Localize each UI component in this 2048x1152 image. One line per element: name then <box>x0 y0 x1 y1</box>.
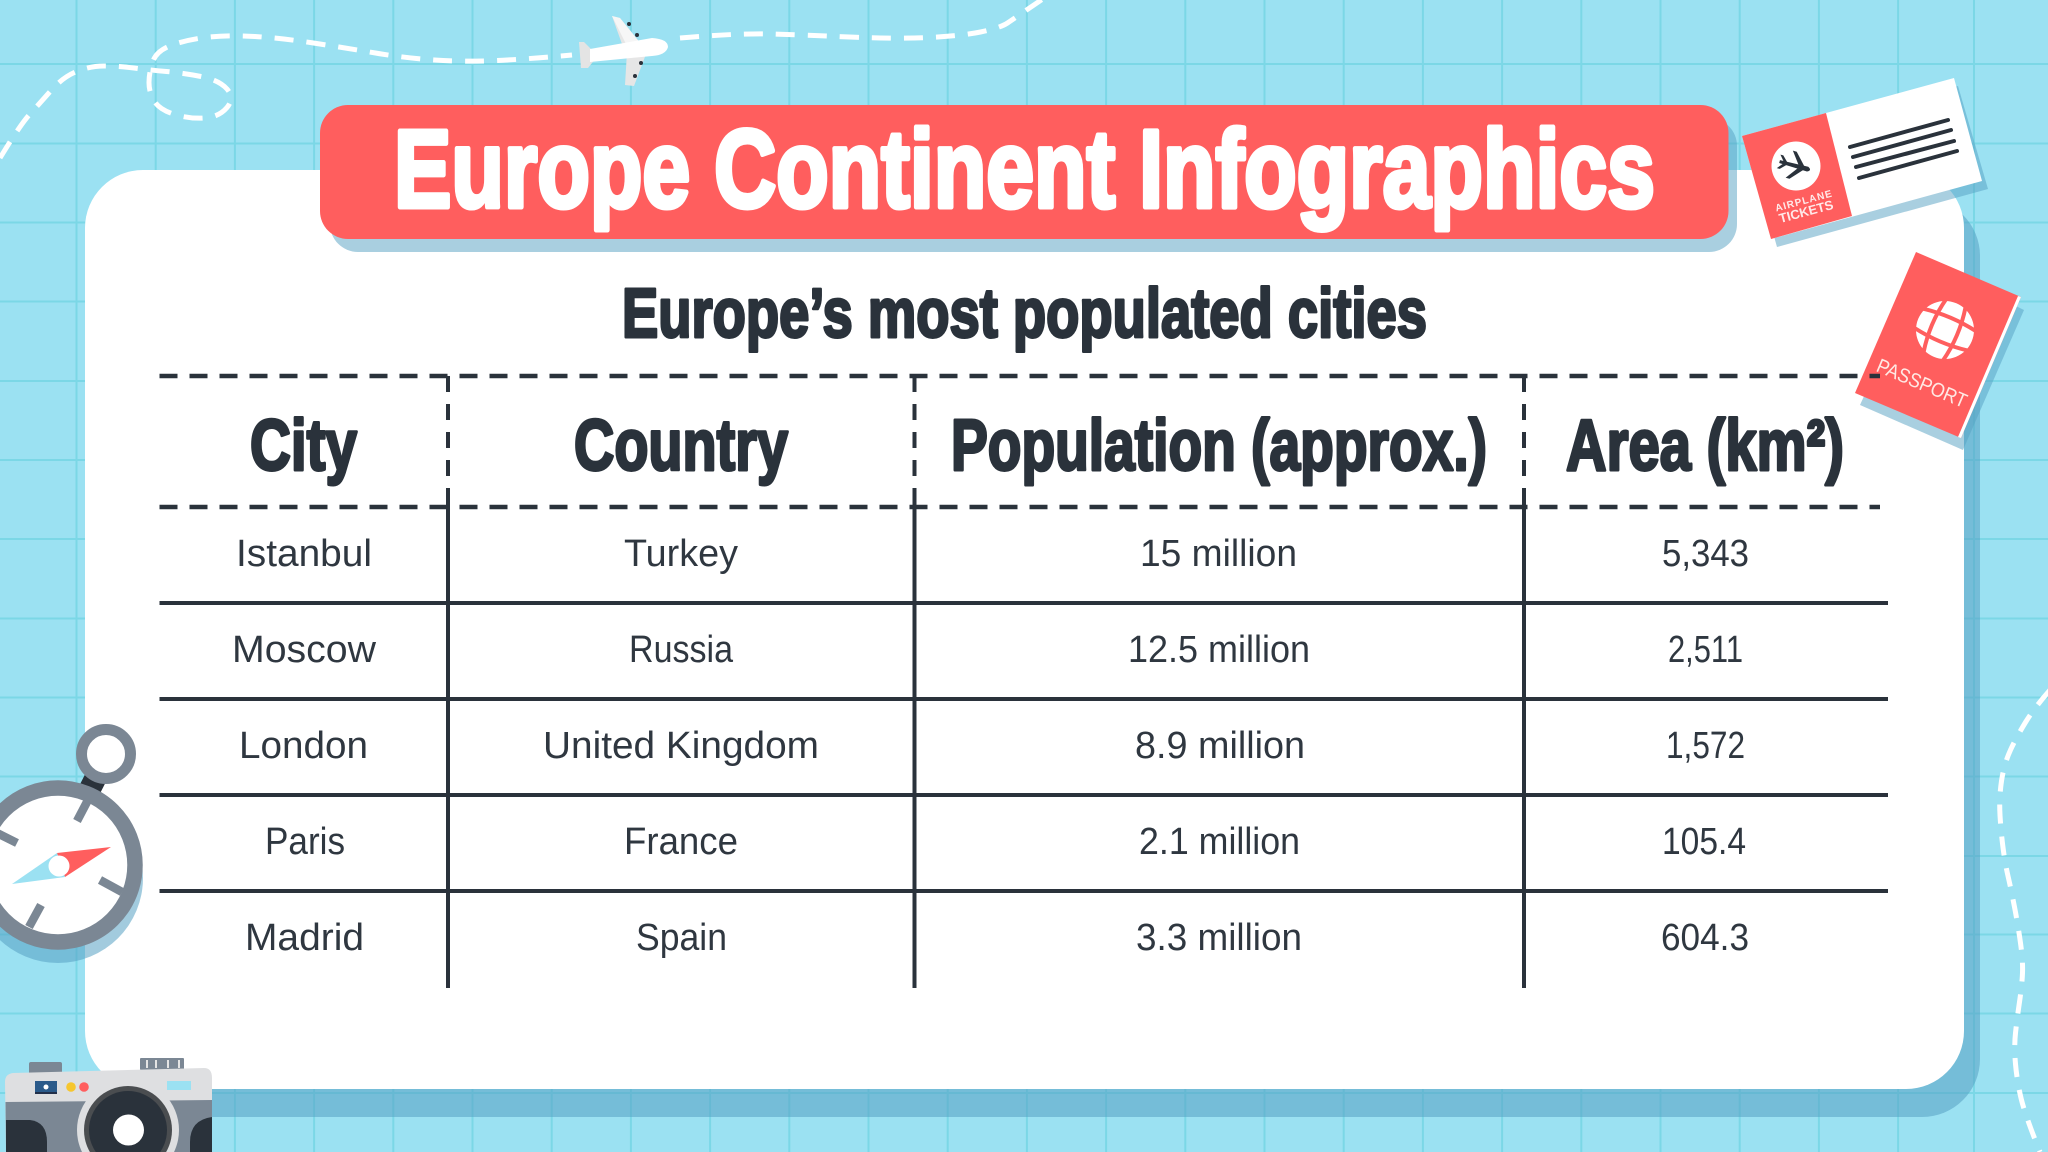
flight path: upper right dashed route <box>680 0 1050 38</box>
icon: airplane ticket: AIRPLANE <box>1774 189 1834 214</box>
icon: camera <box>5 1058 212 1152</box>
row: Moscow: Russia <box>629 629 734 671</box>
row: Moscow: 2,511 <box>1668 629 1743 671</box>
row: Istanbul: Istanbul <box>236 533 372 575</box>
flight path: upper left dashed route <box>0 36 572 158</box>
row: Moscow <box>232 629 1743 671</box>
row: Madrid: Madrid <box>245 917 364 959</box>
row: London: 8.9 million <box>1135 725 1305 767</box>
panel: white card <box>85 170 1964 1089</box>
header: population: Population (approx.) <box>951 406 1487 486</box>
icon: passport: PASSPORT <box>1873 355 1970 413</box>
table grid lines <box>160 376 1888 988</box>
title banner <box>320 105 1737 252</box>
header: area: Area (km²) <box>1566 406 1844 486</box>
row: Paris: 105.4 <box>1662 821 1746 863</box>
header: country: Country <box>574 406 788 486</box>
row: Istanbul: 5,343 <box>1662 533 1749 575</box>
row: Paris: 2.1 million <box>1139 821 1300 863</box>
row: London: United Kingdom <box>543 725 819 767</box>
row: Madrid <box>245 917 1749 959</box>
row: Istanbul: 15 million <box>1140 533 1297 575</box>
icon: passport <box>1855 252 2024 450</box>
row: Madrid: 3.3 million <box>1136 917 1302 959</box>
row: London <box>239 725 1745 767</box>
row: Istanbul: Turkey <box>624 533 738 575</box>
flight path: right dashed route <box>2000 690 2048 1152</box>
row: Moscow: Moscow <box>232 629 377 671</box>
row: Paris <box>265 821 1746 863</box>
icon: airplane ticket: TICKETS <box>1777 197 1835 226</box>
subtitle: Europe’s most populated cities <box>622 274 1427 352</box>
table <box>160 376 1888 988</box>
panel: card shadow <box>101 198 1980 1117</box>
header: city: City <box>250 406 357 486</box>
row: Paris: Paris <box>265 821 345 863</box>
row: Istanbul <box>236 533 1749 575</box>
row: Paris: France <box>624 821 738 863</box>
row: Moscow: 12.5 million <box>1128 629 1310 671</box>
icon: airplane <box>579 16 668 86</box>
row: Madrid: 604.3 <box>1661 917 1749 959</box>
icon: airplane ticket <box>1742 78 1988 247</box>
row: London: London <box>239 725 368 767</box>
row: London: 1,572 <box>1666 725 1745 767</box>
title: Europe Continent Infographics <box>394 108 1655 231</box>
icon: compass <box>0 730 143 963</box>
row: Madrid: Spain <box>636 917 727 959</box>
